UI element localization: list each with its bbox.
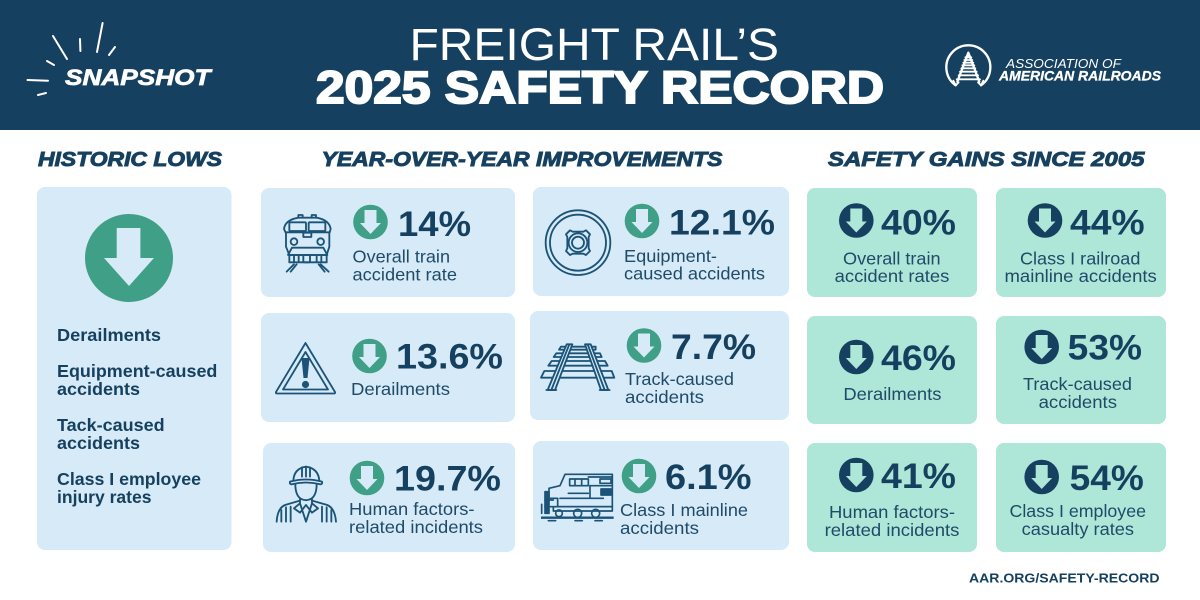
label: Track-caused	[625, 369, 734, 389]
heading: year-over-year improvements: YEAR-OVER-YEAR IMPROVEMENTS	[322, 149, 723, 171]
label: Class I employee	[1010, 501, 1146, 521]
card: overall train accident rates 40%	[807, 188, 977, 297]
label	[1023, 374, 1132, 412]
label: caused accidents	[624, 264, 765, 284]
label: Overall train	[352, 246, 450, 266]
stat: 44%	[1070, 202, 1145, 242]
icon: down arrow	[352, 339, 387, 373]
icon: down arrow	[1028, 203, 1062, 238]
label: related incidents	[825, 520, 960, 540]
card: class I employee casualty rates 54%	[996, 443, 1166, 552]
label: Track-caused	[1023, 374, 1132, 394]
stat: 53%	[1068, 328, 1142, 368]
list: historic low categories: accidents	[57, 379, 140, 399]
snapshot badge: SNAPSHOT	[65, 65, 212, 90]
label	[1004, 248, 1157, 286]
label	[825, 502, 960, 540]
icon: wheel	[546, 210, 610, 275]
label	[352, 246, 457, 284]
label: Human factors-	[349, 499, 475, 519]
label: accidents	[620, 518, 699, 538]
stat: 14%	[398, 204, 471, 244]
heading: safety gains since 2005: SAFETY GAINS SINCE 2005	[828, 149, 1146, 171]
icon: down arrow	[627, 328, 661, 363]
icon: down arrow	[839, 458, 874, 492]
title: 2025 SAFETY RECORD	[316, 62, 884, 113]
icon: locomotive front	[284, 215, 331, 272]
stat: 6.1%	[665, 457, 752, 497]
icon: large down arrow	[85, 214, 173, 302]
card: derailments 13.6%	[261, 313, 515, 422]
label: Overall train	[843, 248, 941, 268]
card: class I railroad mainline accidents 44%	[996, 188, 1166, 297]
logo: Association of American Railroads	[946, 45, 1161, 85]
source url: AAR.ORG/SAFETY-RECORD	[969, 570, 1160, 586]
card: human factors-related incidents 41%	[807, 443, 977, 552]
label: accidents	[625, 387, 704, 407]
list: historic low categories: Equipment-caused	[57, 361, 217, 381]
panel: historic lows	[37, 187, 232, 550]
card: class I mainline accidents 6.1%	[533, 441, 789, 550]
label	[624, 246, 765, 284]
icon: down arrow	[350, 461, 384, 495]
logo: Association of American Railroads: AMERICAN RAILROADS	[998, 68, 1161, 84]
stat: 13.6%	[396, 336, 503, 376]
card: human factors-related incidents 19.7%	[263, 443, 515, 552]
label	[625, 369, 734, 407]
icon: worker with hard hat	[277, 467, 336, 522]
card: overall train accident rate 14%	[261, 188, 515, 297]
icon: down arrow	[625, 204, 659, 238]
label: Equipment-	[624, 246, 717, 266]
label: Derailments	[843, 384, 942, 404]
label: mainline accidents	[1004, 266, 1157, 286]
icon: down arrow	[622, 459, 656, 493]
stat: 12.1%	[669, 202, 775, 242]
card: track-caused accidents 7.7%	[530, 311, 789, 420]
list: historic low categories: accidents	[57, 433, 140, 453]
label: Human factors-	[829, 502, 955, 522]
card: derailments 46%	[807, 316, 977, 424]
label	[835, 248, 950, 286]
label	[1010, 501, 1146, 539]
label	[349, 499, 483, 537]
icon: warning triangle	[276, 343, 335, 394]
icon: down arrow	[1024, 460, 1059, 494]
label: Class I mainline	[620, 500, 748, 520]
card: equipment-caused accidents 12.1%	[533, 187, 789, 296]
stat: 54%	[1070, 458, 1144, 498]
icon: down arrow	[353, 205, 388, 239]
list: historic low categories	[57, 325, 217, 507]
list: historic low categories: injury rates	[57, 487, 152, 507]
snapshot badge	[28, 23, 212, 95]
stat: 46%	[881, 338, 956, 378]
card: track-caused accidents 53%	[996, 316, 1166, 424]
logo: Association of American Railroads: ASSOCIATION OF	[1005, 57, 1122, 71]
icon: down arrow	[1024, 330, 1059, 364]
title	[316, 19, 884, 113]
stat: 41%	[881, 456, 956, 496]
heading: historic lows: HISTORIC LOWS	[38, 149, 223, 171]
label: related incidents	[349, 517, 483, 537]
header banner	[0, 0, 1200, 130]
icon: railroad track	[541, 344, 614, 390]
label: Class I railroad	[1020, 248, 1140, 268]
label: Derailments	[351, 379, 450, 399]
list: historic low categories: Derailments	[57, 325, 161, 345]
label: casualty rates	[1022, 519, 1134, 539]
label: accident rate	[352, 264, 457, 284]
list: historic low categories: Class I employee	[57, 469, 201, 489]
stat: 19.7%	[394, 458, 501, 498]
list: historic low categories: Tack-caused	[57, 415, 165, 435]
icon: down arrow	[839, 203, 874, 238]
stat: 7.7%	[671, 327, 756, 367]
title: FREIGHT RAIL’S	[410, 19, 779, 70]
label: accident rates	[835, 266, 950, 286]
label	[620, 500, 748, 538]
icon: down arrow	[839, 340, 874, 374]
stat: 40%	[881, 202, 956, 242]
icon: freight locomotive	[541, 474, 614, 521]
label: accidents	[1039, 392, 1117, 412]
